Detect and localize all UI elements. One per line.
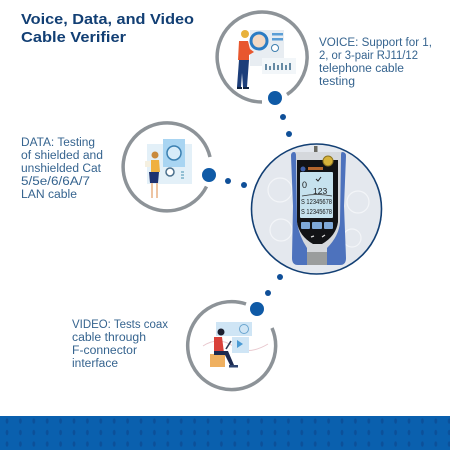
voice connector dot [268,91,282,105]
voice text: telephone cable [319,63,404,75]
video text: F-connector [72,345,137,357]
voice text: testing [319,76,355,88]
cable verifier device: 0 [302,180,307,190]
panel: video [188,302,276,390]
video connector dot [250,302,264,316]
panel: device [252,144,382,274]
video text: interface [72,358,118,370]
cable verifier device: S 12345678 [301,209,332,216]
panel: data [123,123,216,211]
cable verifier device: S 12345678 [301,199,332,206]
data text [21,137,103,201]
title: Voice, Data, and Video [21,11,194,28]
data text: of shielded and [21,150,103,162]
panel: voice [217,12,307,105]
data text: LAN cable [21,189,77,201]
small dots device to video [265,274,283,296]
cable verifier device: 123 [313,186,327,196]
data illustration: woman [145,152,160,198]
title: Cable Verifier [21,29,126,46]
video text: VIDEO: Tests coax [72,319,168,331]
footer band [0,416,450,450]
voice text: 2, or 3-pair RJ11/12 [319,50,418,62]
title [21,11,194,46]
video illustration: person on box [210,328,238,368]
data text: DATA: Testing [21,137,95,149]
data connector dot [202,168,216,182]
voice illustration: dashboard [250,30,296,74]
small dots data to device [225,178,247,188]
data text: unshielded Cat [21,163,102,175]
small dots voice to device [280,114,292,137]
data text: 5/5e/6/6A/7 [21,176,90,188]
voice text [319,37,432,88]
data illustration: dashboards [147,139,192,184]
device decorative gears [268,178,369,247]
data ring [123,123,210,211]
video illustration: screens [203,322,268,353]
device circle [252,144,382,274]
cable verifier device [291,146,346,265]
video ring [188,302,276,390]
video text: cable through [72,332,146,344]
voice text: VOICE: Support for 1, [319,37,432,49]
voice illustration: worker [237,30,254,89]
video text [72,319,168,370]
voice ring [217,12,307,102]
